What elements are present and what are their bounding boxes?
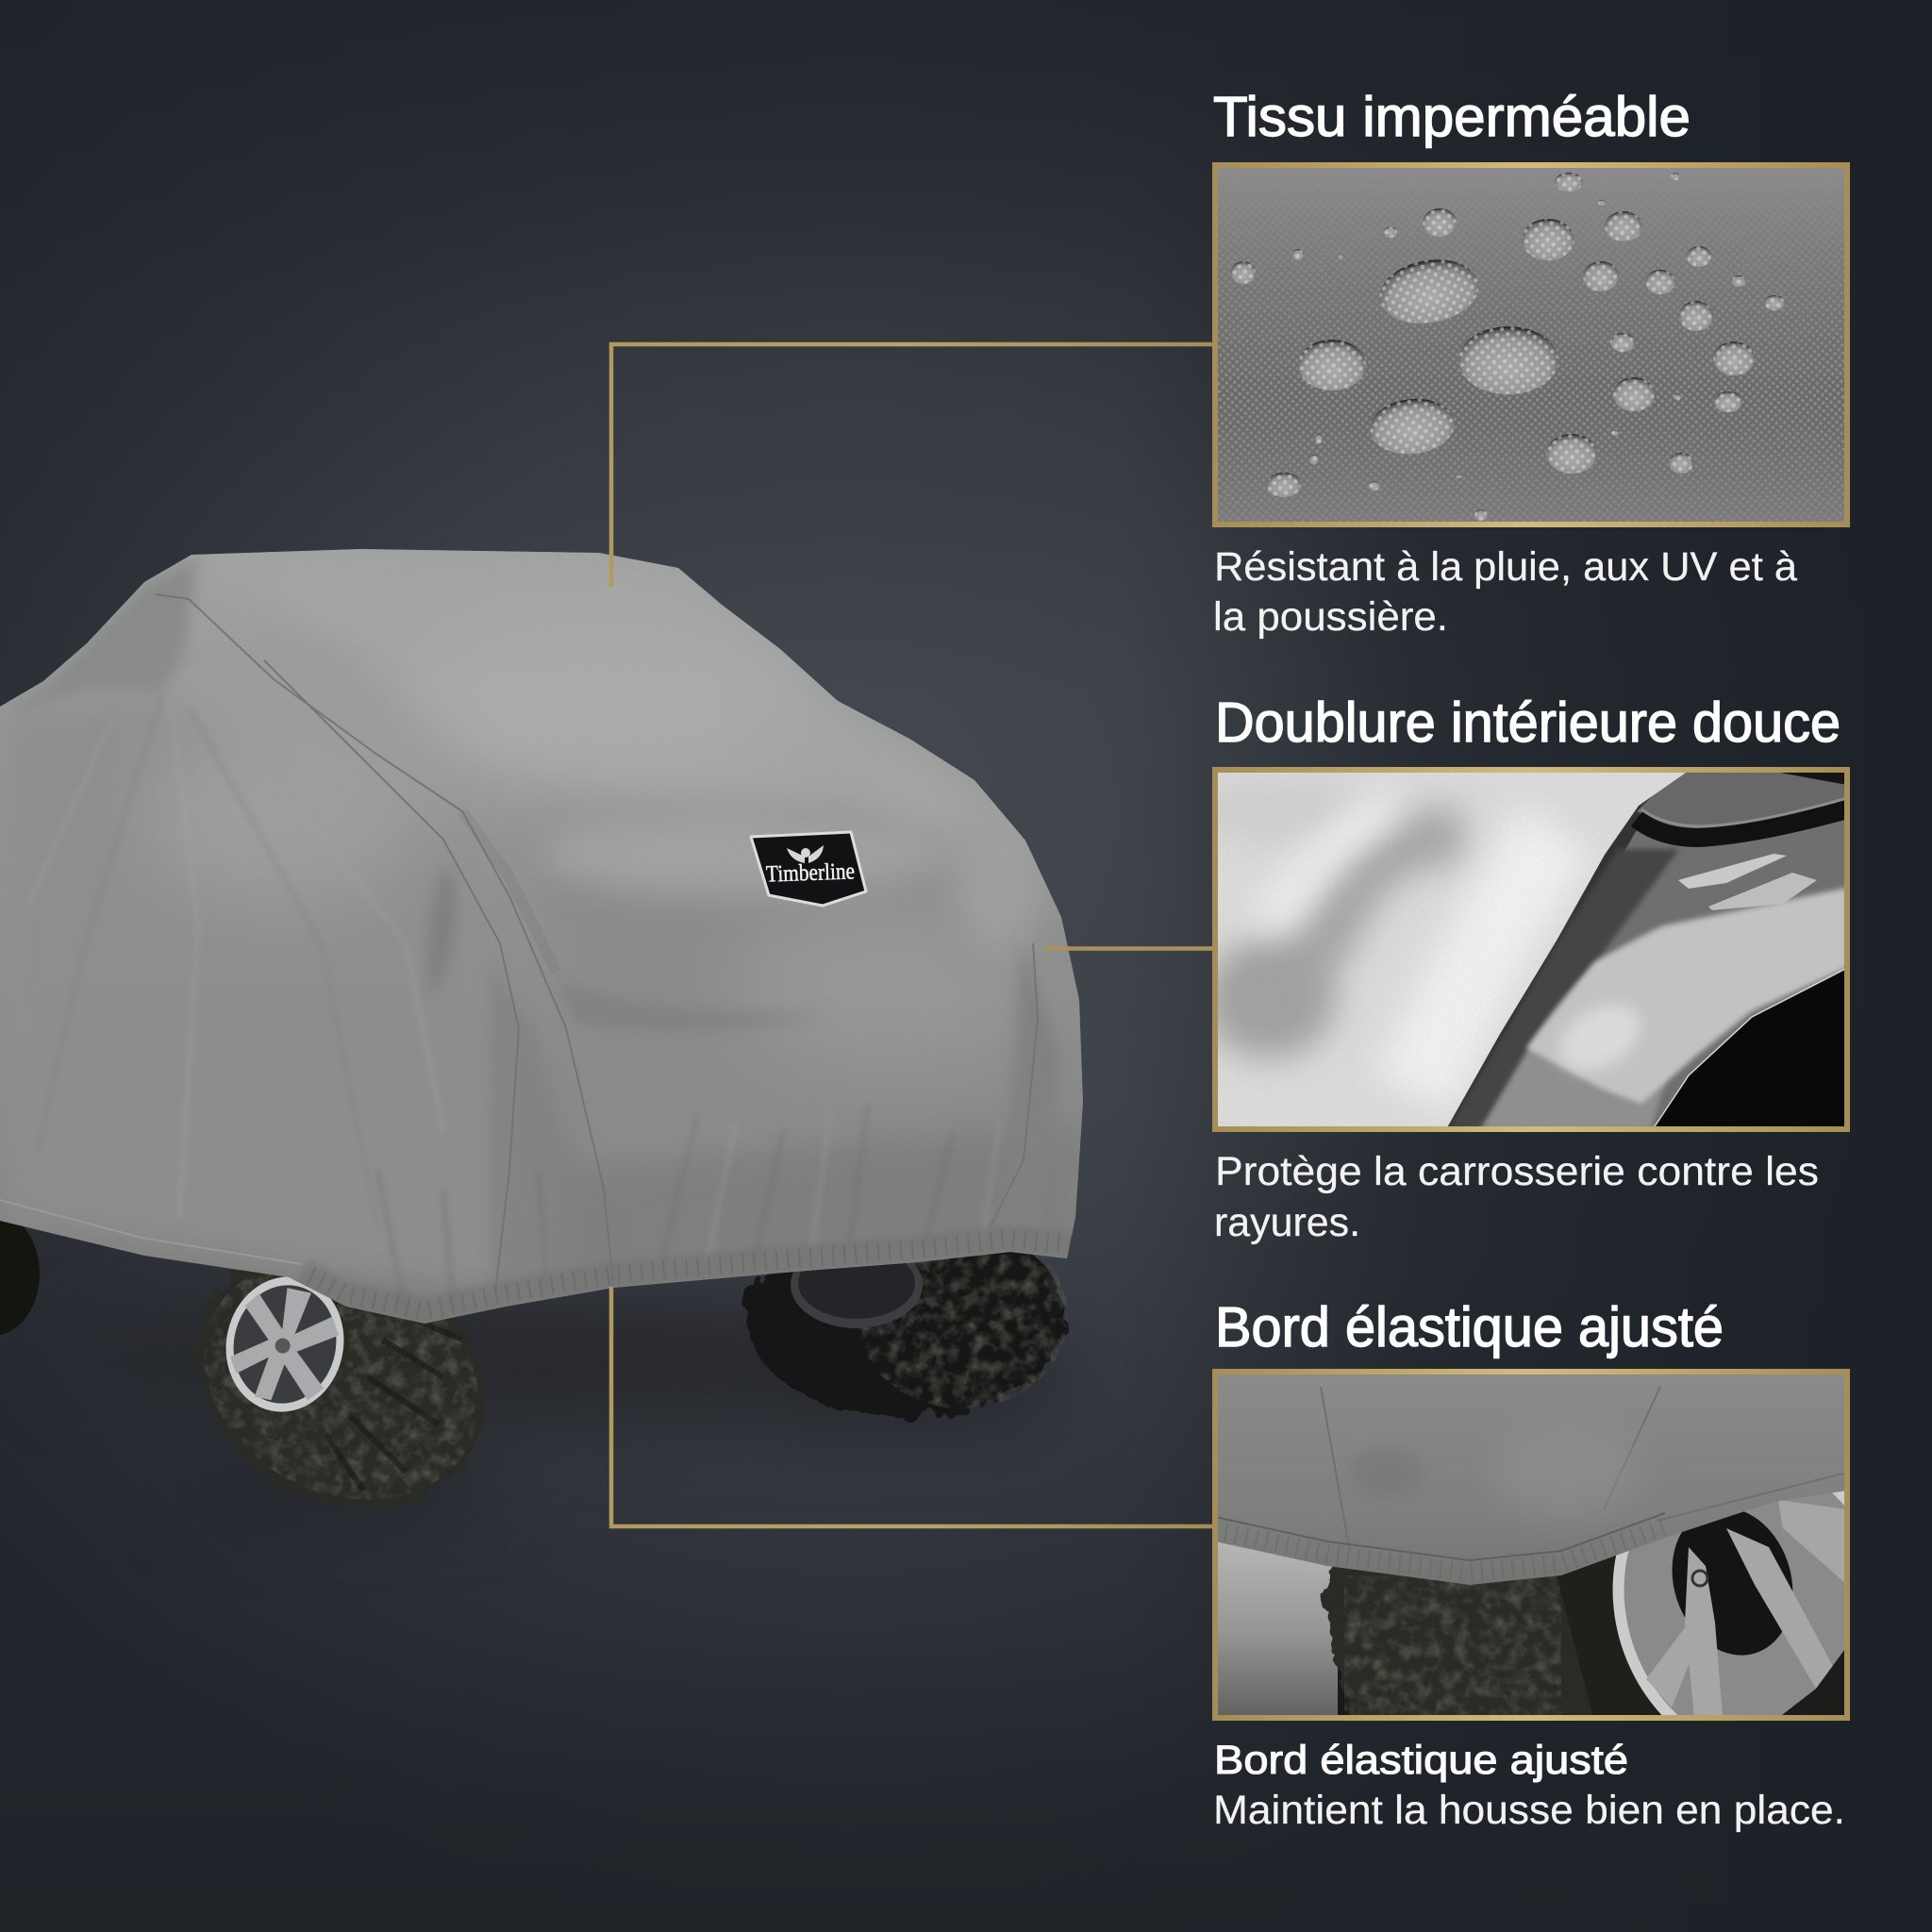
text: waterproof description: [1213, 544, 1797, 640]
cover: seams: [156, 594, 1038, 1292]
text: lining description: Protège la carrosserie contre les: [1215, 1149, 1819, 1194]
cover: left side fan folds: [28, 694, 443, 1226]
text: waterproof description: la poussière.: [1213, 594, 1448, 640]
connector: waterproof fabric: [611, 344, 1212, 587]
heading: Tissu imperméable: Tissu imperméable: [1213, 86, 1690, 148]
fender light strips: [1678, 854, 1787, 889]
text: lining description: [1214, 1149, 1819, 1245]
cover: elastic hem: [302, 1239, 1071, 1310]
heading: Bord élastique ajusté: Bord élastique ajusté: [1215, 1296, 1724, 1358]
badge: Timberline: [751, 832, 866, 906]
wheel: far left: [0, 1211, 40, 1336]
wheel: front right: [741, 1252, 1070, 1423]
wheel arch: [1653, 969, 1847, 1129]
cover: dark folds: [429, 868, 454, 1000]
tyre: [151, 1200, 532, 1558]
tyre: [745, 1215, 1066, 1417]
cover: lower wrinkles: [377, 1104, 1000, 1311]
vehicle cover: [0, 538, 1094, 1340]
fender lower: [1481, 925, 1679, 1129]
badge wordmark: Timberline: [766, 858, 855, 888]
cover: roof light: [226, 549, 985, 828]
fender highlight: [1526, 888, 1847, 1104]
dash and handle: [1637, 773, 1844, 826]
wheel spokes: [1646, 1500, 1847, 1717]
text: hem subtitle and description: [1213, 1738, 1845, 1833]
text: hem subtitle and description: Maintient la housse bien en place.: [1213, 1788, 1845, 1833]
rim: [213, 1266, 357, 1423]
heading: Doublure intérieure douce: Doublure intérieure douce: [1215, 691, 1840, 754]
tread grooves: [325, 1316, 462, 1491]
text: lining description: rayures.: [1214, 1200, 1360, 1245]
fender upper: [1462, 811, 1847, 1129]
cover fabric and hem: [1215, 1372, 1847, 1585]
text: waterproof description: Résistant à la pluie, aux UV et à: [1214, 544, 1797, 590]
floor: [1215, 1538, 1338, 1722]
panel: waterproof fabric photo: [1215, 165, 1847, 525]
connector: elastic hem: [611, 1287, 1212, 1526]
wheel: front left with silver rim: [192, 1269, 487, 1513]
floor shadow under vehicle: [57, 1292, 1075, 1509]
panel: soft lining photo: [1189, 764, 1847, 1132]
rim: [791, 1241, 923, 1328]
tyre tread: [1321, 1557, 1679, 1726]
cover: left side tone: [0, 698, 566, 1302]
text: hem subtitle and description: Bord élastique ajusté: [1214, 1738, 1628, 1783]
cover: front panel tone: [616, 953, 1083, 1288]
icon: wings emblem: [787, 845, 824, 863]
water droplets: [1231, 173, 1785, 521]
connector: soft lining: [1044, 946, 1212, 951]
wheel rim: [1572, 1407, 1932, 1801]
fleece lining: [1189, 764, 1698, 1132]
panel: elastic hem photo: [1215, 1372, 1932, 1801]
